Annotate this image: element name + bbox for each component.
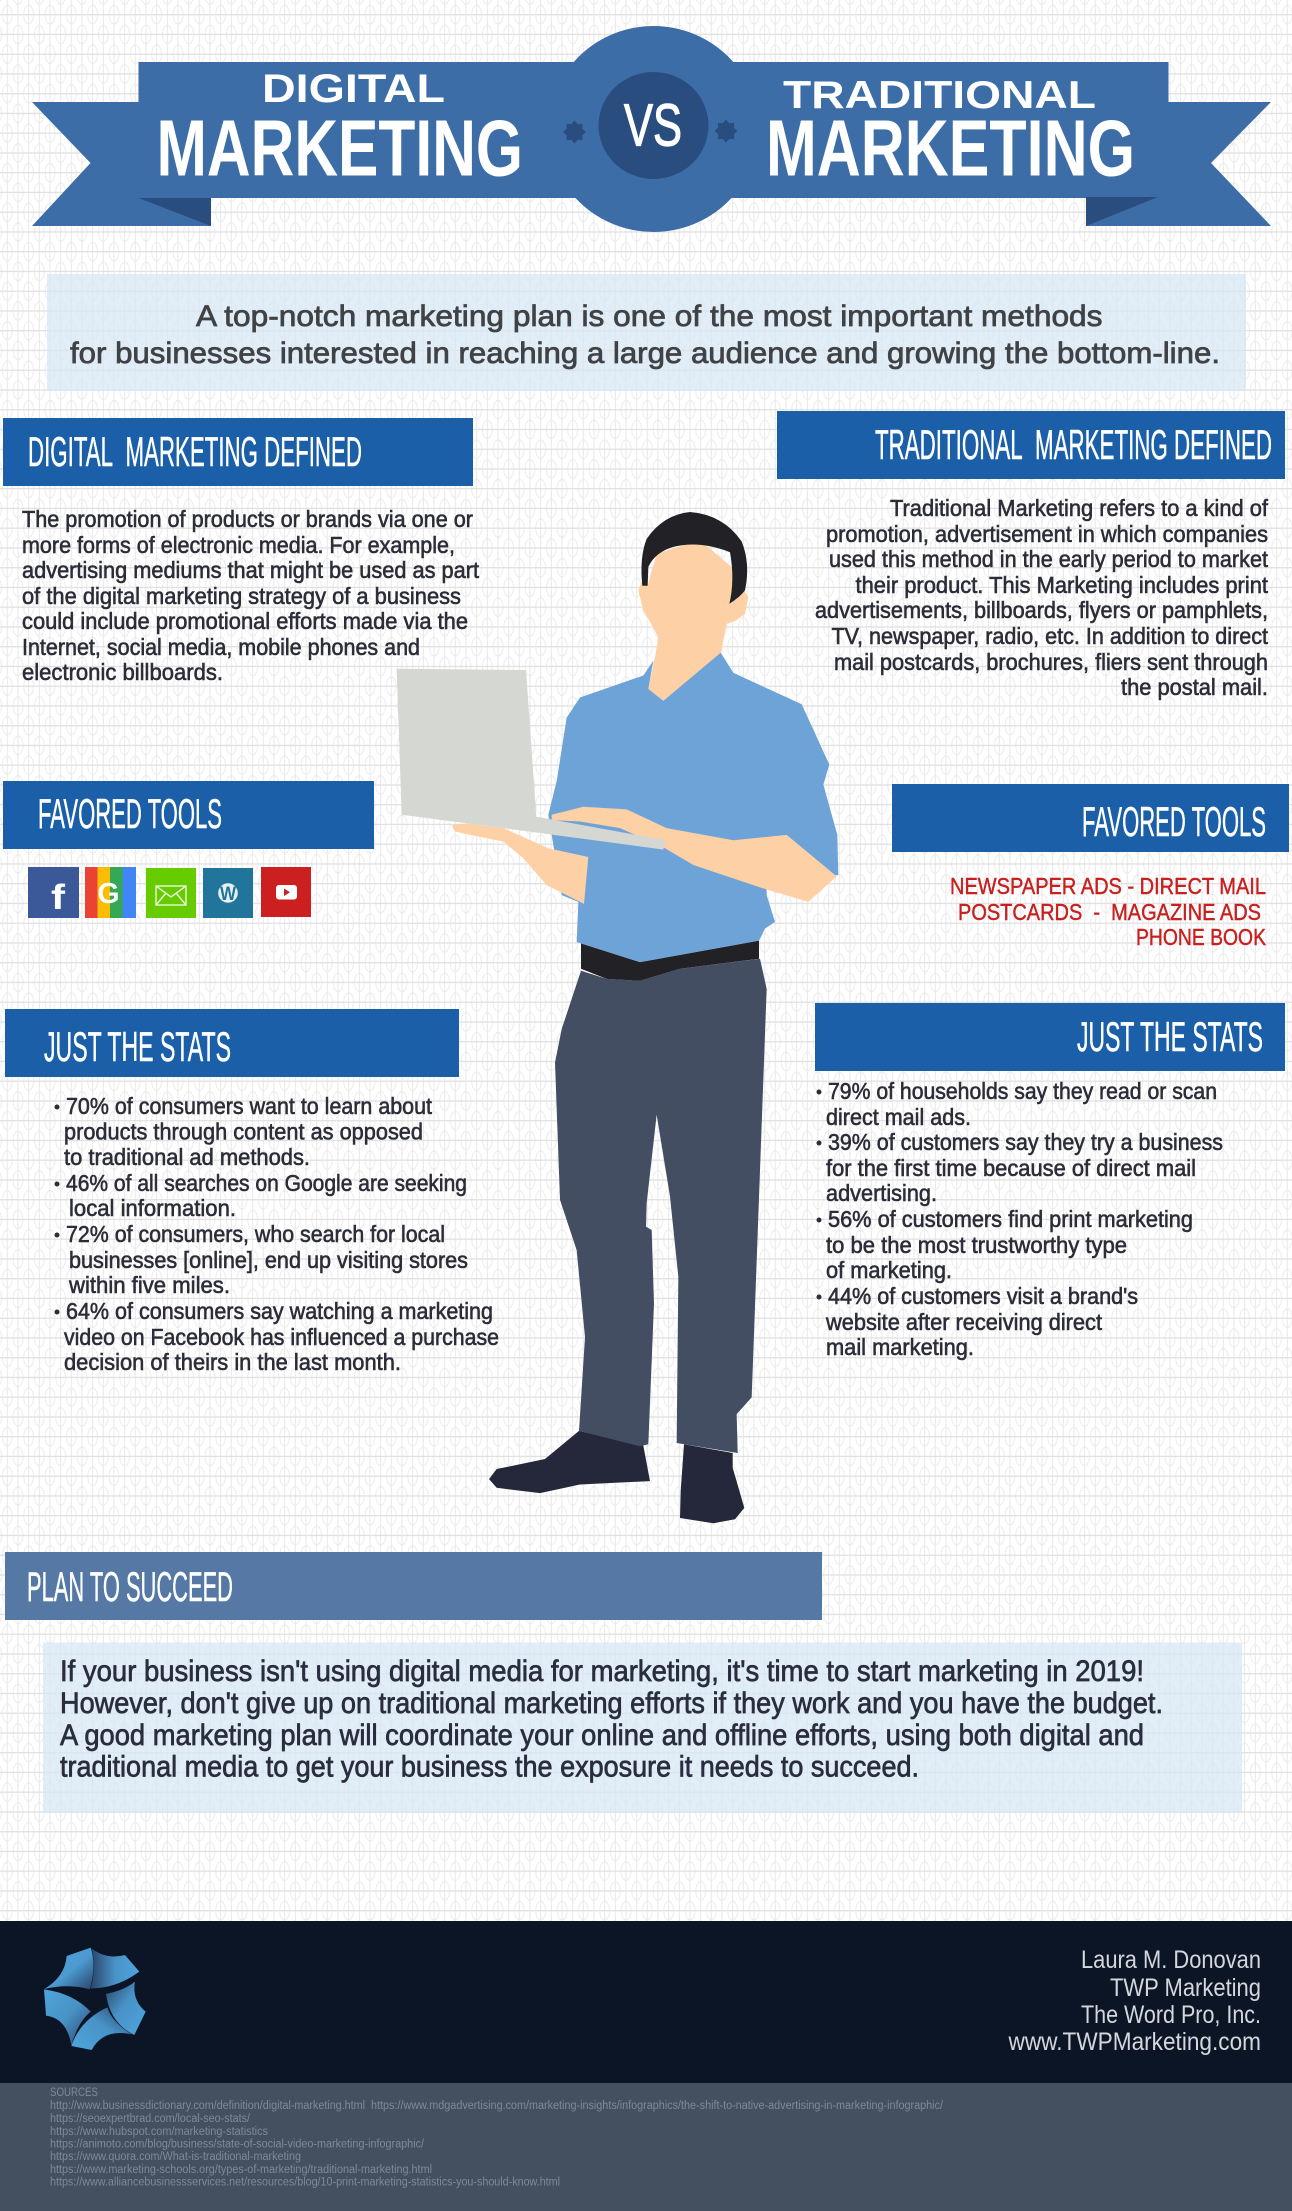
laptop [397,669,665,850]
body text: electronic billboards. [22,659,223,685]
sources text: https://www.marketing-schools.org/types-of-marketing/traditional-marketing.html [50,2164,432,2176]
body text: their product. This Marketing includes print [856,572,1268,598]
footer background [0,1921,1292,2083]
stats text: 56% of customers find print marketing [828,1206,1193,1232]
body text: Internet, social media, mobile phones and [22,634,420,660]
stats text: to traditional ad methods. [64,1144,310,1170]
body text: The promotion of products or brands via one or [22,506,473,532]
contact text: www.TWPMarketing.com [1008,2028,1261,2056]
left fold [138,198,211,226]
contact text: Laura M. Donovan [1081,1946,1261,1974]
belt [581,941,759,981]
heading text: DIGITAL MARKETING DEFINED [28,428,362,475]
intro text: for businesses interested in reaching a large audience and growing the bottom-line. [70,337,1220,370]
panel: traditional defined [777,411,1285,700]
icon: wordpress: W [220,884,236,905]
stats text: 46% of all searches on Google are seeking [66,1170,467,1196]
center medallion [548,26,758,232]
sources text: https://www.mdgadvertising.com/marketing-insights/infographics/the-shift-to-native-advertising-in-marketing-infographic/ [371,2100,944,2112]
stats text: website after receiving direct [825,1309,1102,1335]
icon: facebook: f [51,878,65,917]
heading text: PLAN TO SUCCEED [27,1563,233,1610]
icon: youtube [261,867,311,917]
stats text: 39% of customers say they try a business [828,1129,1223,1155]
left ornament [563,120,586,144]
plan text: However, don't give up on traditional marketing efforts if they work and you have the budget. [60,1687,1163,1720]
stats text: to be the most trustworthy type [826,1232,1127,1258]
right arm [552,807,837,902]
body text: Traditional Marketing refers to a kind of [890,495,1268,521]
stats text: 72% of consumers, who search for local [66,1221,445,1247]
face and neck [638,540,748,701]
body text: mail postcards, brochures, fliers sent through [834,649,1268,675]
ribbon left tail [32,102,211,226]
contact text: The Word Pro, Inc. [1081,2001,1261,2029]
plan text: A good marketing plan will coordinate your online and offline efforts, using both digital and [60,1719,1144,1752]
stats text: 79% of households say they read or scan [828,1078,1217,1104]
shirt [548,653,838,962]
title banner [32,26,1271,232]
tool list: PHONE BOOK [1136,924,1266,950]
body text: promotion, advertisement in which companies [826,521,1268,547]
heading bar [5,1552,822,1620]
contact text: TWP Marketing [1110,1974,1261,2002]
heading: marketing right: MARKETING [766,104,1135,192]
illustration: man holding laptop [397,512,838,1523]
body text: used this method in the early period to market [829,546,1268,572]
body text: could include promotional efforts made via the [22,608,468,634]
stats text: 64% of consumers say watching a marketing [66,1298,493,1324]
ribbon right tail [1086,102,1271,226]
stats text: mail marketing. [826,1334,974,1360]
shoes [489,1431,744,1523]
stats text: 44% of customers visit a brand's [828,1283,1138,1309]
plan background [43,1642,1242,1813]
sources text: https://seoexpertbrad.com/local-seo-stats/ [50,2113,251,2125]
heading bar [3,418,473,486]
stats text: local information. [69,1195,236,1221]
heading bar [815,1003,1285,1071]
sources background [0,2083,1292,2211]
heading bar [3,781,374,849]
sources text: https://www.quora.com/What-is-traditional-marketing [50,2151,301,2163]
body text: more forms of electronic media. For example, [22,532,455,558]
center inner disc [598,72,708,179]
panel: digital stats [5,1009,499,1375]
icon: wordpress [203,868,253,918]
heading bar [777,411,1285,479]
body text: the postal mail. [1121,674,1268,700]
icon: google [85,867,136,918]
stats text: of marketing. [826,1257,952,1283]
ribbon body [138,62,1168,198]
body text: advertisements, billboards, flyers or pamphlets, [815,597,1268,623]
panel: plan to succeed [5,1552,1242,1813]
intro background [47,274,1246,391]
heading text: JUST THE STATS [44,1023,231,1070]
left hand [452,823,588,904]
stats text: direct mail ads. [826,1104,971,1130]
stats text: 70% of consumers want to learn about [66,1093,432,1119]
stats text: video on Facebook has influenced a purchase [64,1324,499,1350]
vs: VS [624,92,682,158]
heading bar [5,1009,459,1077]
panel: digital defined [3,418,479,685]
heading bar [892,784,1289,852]
stats text: businesses [online], end up visiting stores [69,1247,468,1273]
sources text: https://www.alliancebusinessservices.net/resources/blog/10-print-marketing-statistics-you-should-know.html [50,2176,560,2188]
stats text: for the first time because of direct mail [826,1155,1196,1181]
sources text: https://animoto.com/blog/business/state-of-social-video-marketing-infographic/ [50,2138,425,2150]
plan text: traditional media to get your business the exposure it needs to succeed. [60,1750,919,1784]
stats text: decision of theirs in the last month. [64,1349,401,1375]
stats text: within five miles. [68,1272,230,1298]
icon: facebook [28,867,79,918]
body text: advertising mediums that might be used as part [22,557,479,583]
stats text: products through content as opposed [64,1119,423,1145]
bullets [54,1104,60,1314]
panel: traditional stats [815,1003,1285,1360]
icon: email [146,868,196,918]
icon: google: G [98,878,120,910]
sources text: SOURCES [50,2087,98,2099]
bullets [816,1090,822,1300]
heading: traditional: TRADITIONAL [783,74,1096,117]
sources text: http://www.businessdictionary.com/definition/digital-marketing.html [50,2100,365,2112]
stats text: advertising. [826,1180,937,1206]
panel: digital favored tools [3,781,374,918]
panel: traditional favored tools [892,784,1289,950]
heading: digital: DIGITAL [262,67,445,111]
trousers [555,959,767,1453]
heading: marketing left: MARKETING [156,104,523,192]
hair [641,512,747,604]
heading text: FAVORED TOOLS [38,790,222,837]
sources panel [0,2083,1292,2211]
intro panel [47,274,1246,391]
intro text: A top-notch marketing plan is one of the most important methods [196,300,1102,333]
right fold [1086,197,1158,226]
right ornament [714,120,738,142]
footer [0,1921,1292,2083]
sources text: https://www.hubspot.com/marketing-statistics [50,2126,268,2138]
logo [44,1948,146,2050]
plan text: If your business isn't using digital media for marketing, it's time to start marketing in 2019! [60,1655,1144,1688]
body text: of the digital marketing strategy of a business [22,583,461,609]
